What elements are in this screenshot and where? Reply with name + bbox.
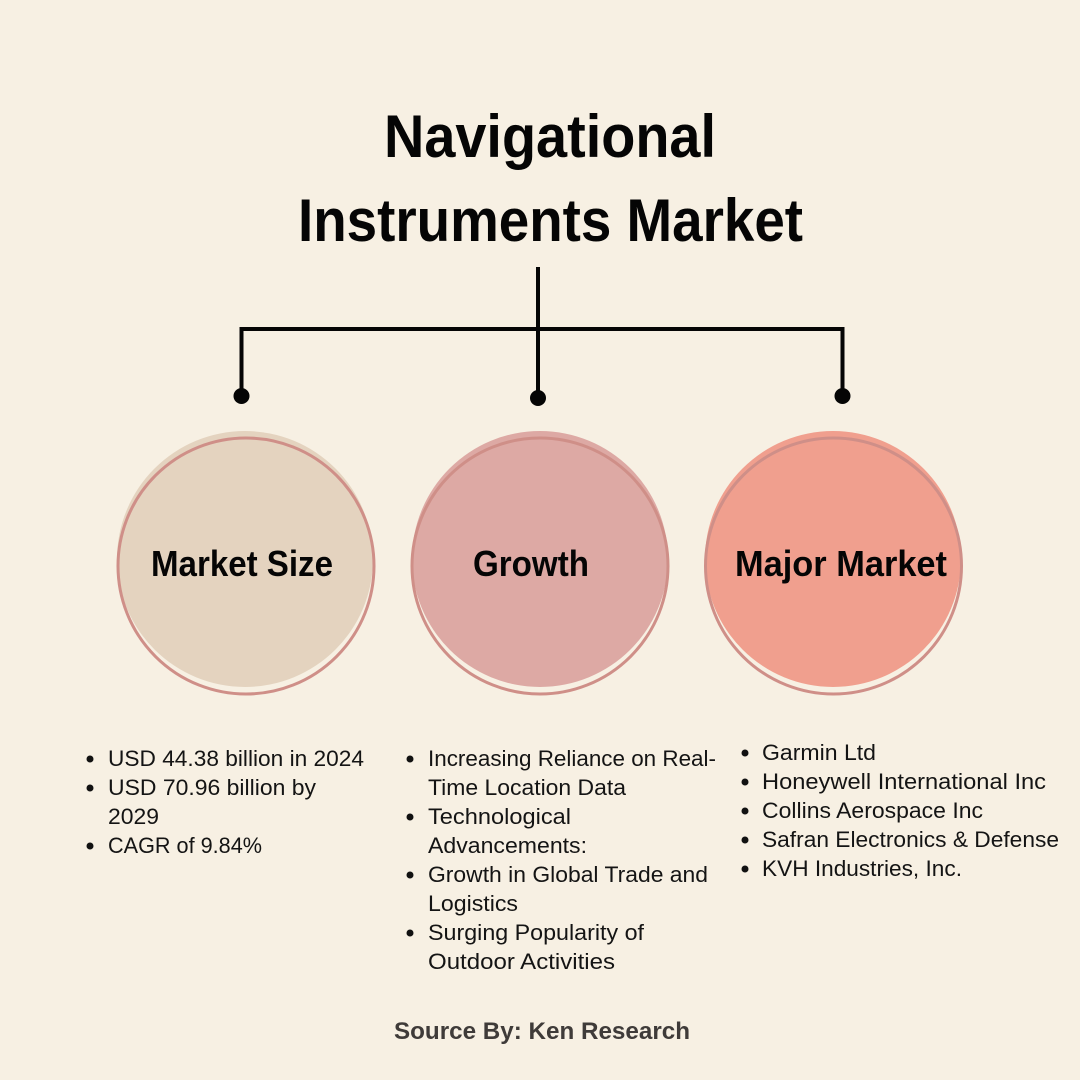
text block: market size bullets <box>86 746 364 858</box>
text block: market size bullets: 2029 <box>108 804 159 829</box>
title: Instruments Market <box>298 187 803 254</box>
text block: major market bullets: KVH Industries, Inc. <box>762 856 962 881</box>
text block: growth bullets: Time Location Data <box>428 775 627 800</box>
panel: growth circle <box>412 431 668 694</box>
source credit: Source By: Ken Research <box>394 1018 690 1045</box>
text block: major market bullets: Collins Aerospace Inc <box>762 798 983 823</box>
text block: market size bullets: USD 70.96 billion by <box>108 775 316 800</box>
text block: major market bullets: Garmin Ltd <box>762 740 876 765</box>
text block: market size bullets: CAGR of 9.84% <box>108 833 262 858</box>
panel: major market circle <box>705 431 962 694</box>
text block: growth bullets <box>406 746 716 974</box>
text block: growth bullets: Advancements: <box>428 833 587 858</box>
text block: growth bullets: Technological <box>428 804 571 829</box>
text block: major market bullets: Safran Electronics & Defense <box>762 827 1059 852</box>
text block: growth bullets: Increasing Reliance on Real- <box>428 746 716 771</box>
title: Navigational <box>384 103 716 170</box>
text block: market size bullets: USD 44.38 billion in 2024 <box>108 746 364 771</box>
connector tree <box>234 267 850 406</box>
panel: market size circle <box>117 431 374 694</box>
text block: major market bullets: Honeywell International Inc <box>762 769 1046 794</box>
panel: growth circle: Growth <box>473 543 589 584</box>
text block: growth bullets: Growth in Global Trade and <box>428 862 708 887</box>
panel: market size circle: Market Size <box>151 543 333 584</box>
text block: major market bullets <box>742 740 1059 881</box>
title <box>298 103 803 254</box>
text block: growth bullets: Outdoor Activities <box>428 949 615 974</box>
text block: growth bullets: Surging Popularity of <box>428 920 645 945</box>
panel: major market circle: Major Market <box>735 543 947 584</box>
text block: growth bullets: Logistics <box>428 891 518 916</box>
